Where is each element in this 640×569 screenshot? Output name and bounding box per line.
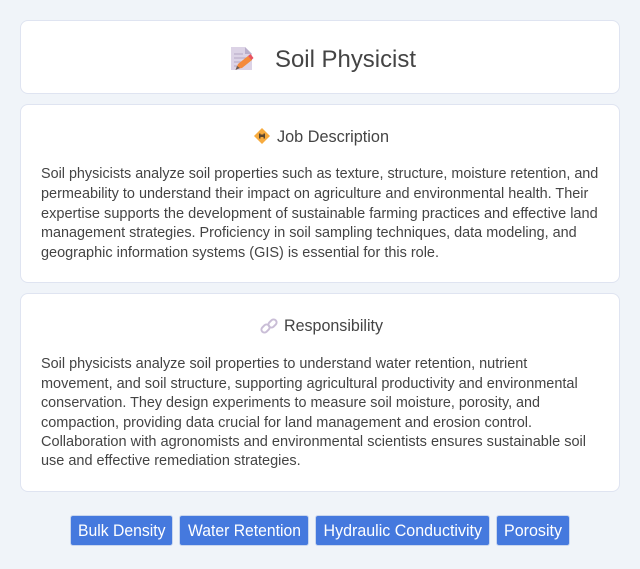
tag labels: Porosity bbox=[504, 522, 563, 540]
text block: responsibility: Collaboration with agronomists and environmental scientists ensures sustainable soil bbox=[41, 434, 586, 450]
icon: link bbox=[260, 318, 278, 334]
icon: memo with pencil bbox=[231, 47, 254, 70]
tag labels: Water Retention bbox=[188, 522, 301, 540]
panel: title card bbox=[20, 20, 620, 94]
tag labels: Hydraulic Conductivity bbox=[324, 522, 483, 540]
icon: diamond sign bbox=[254, 128, 270, 144]
tag labels: Bulk Density bbox=[78, 522, 166, 540]
tag background: Porosity bbox=[496, 515, 570, 546]
text block: responsibility: Soil physicists analyze soil properties to understand water retention, nutrient bbox=[41, 356, 527, 372]
text block: responsibility: compaction, providing data crucial for land management and erosion control. bbox=[41, 415, 532, 431]
text block: job description: permeability to understand their impact on agriculture and environmental health. Their bbox=[41, 186, 588, 202]
text block: responsibility: conservation. They design experiments to measure soil moisture, porosity, and bbox=[41, 395, 540, 411]
text block: job description: geographic information systems (GIS) is essential for this role. bbox=[41, 245, 439, 261]
text block: responsibility: movement, and soil structure, supporting agricultural productivity and environmental bbox=[41, 376, 578, 392]
heading: responsibility: Responsibility bbox=[284, 317, 384, 335]
text block: job description: management strategies. Proficiency in soil sampling techniques, data modeling, and bbox=[41, 225, 577, 241]
text block: responsibility: use and effective remediation strategies. bbox=[41, 453, 301, 469]
text block: job description: Soil physicists analyze soil properties such as texture, structure, moisture retention, and bbox=[41, 166, 598, 182]
text block: job description bbox=[41, 166, 598, 261]
heading: job description: Job Description bbox=[277, 128, 389, 146]
text block: responsibility bbox=[41, 356, 586, 469]
tag background: Hydraulic Conductivity bbox=[315, 515, 490, 546]
tag background: Water Retention bbox=[179, 515, 309, 546]
panel: responsibility card bbox=[20, 293, 620, 492]
title: Soil Physicist bbox=[275, 46, 416, 73]
tag background: Bulk Density bbox=[70, 515, 173, 546]
panel: job description card bbox=[20, 104, 620, 283]
tag labels bbox=[78, 522, 563, 540]
text block: job description: expertise supports the development of sustainable farming practices and effective land bbox=[41, 206, 598, 222]
